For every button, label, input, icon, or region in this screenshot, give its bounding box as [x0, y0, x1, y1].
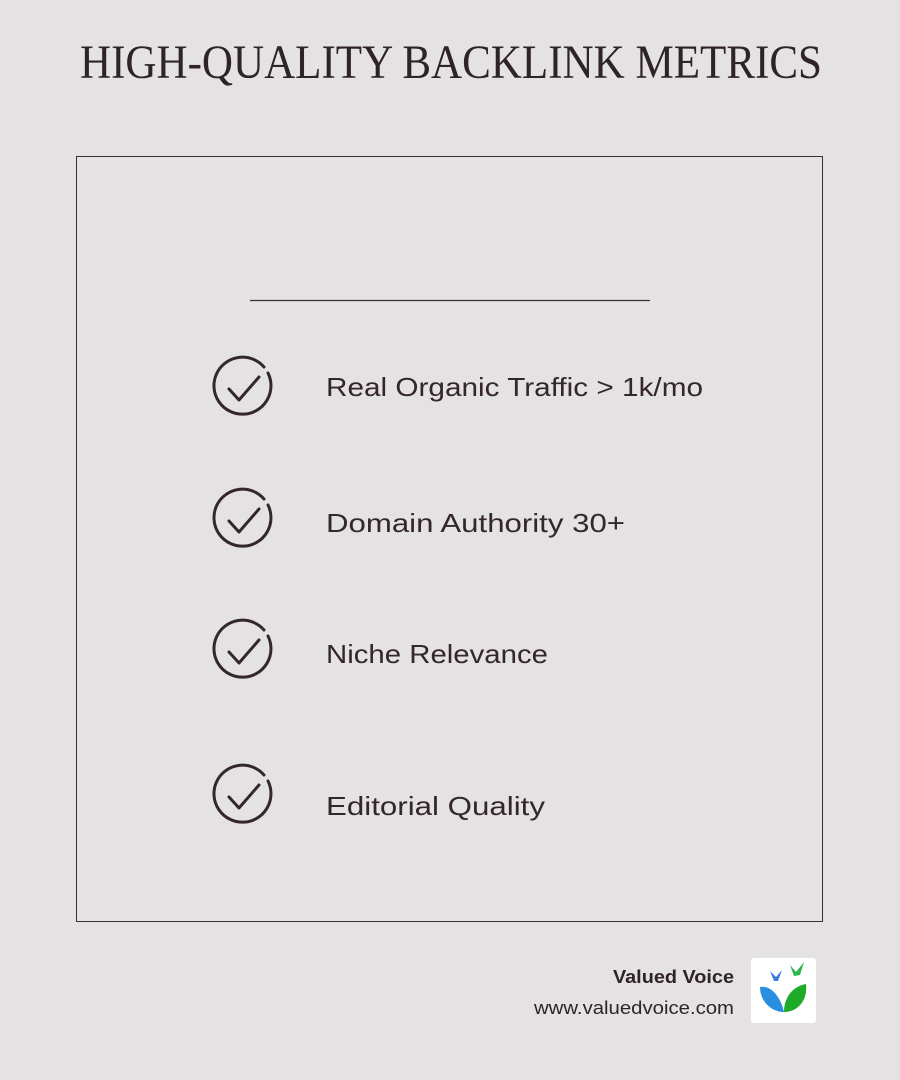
item: niche relevance [214, 620, 548, 677]
title: HIGH-QUALITY BACKLINK METRICS [80, 36, 822, 89]
icon: check circle [214, 620, 271, 677]
icon: check circle [214, 765, 271, 822]
item: organic traffic: Real Organic Traffic > 1k/mo [326, 372, 703, 402]
item: domain authority: Domain Authority 30+ [326, 508, 625, 538]
icon: check circle [214, 357, 271, 414]
item: domain authority [214, 489, 625, 546]
footer brand: www.valuedvoice.com [533, 998, 734, 1018]
item: editorial quality: Editorial Quality [326, 791, 545, 821]
item: organic traffic [214, 357, 703, 414]
icon: logo [751, 958, 816, 1023]
item: niche relevance: Niche Relevance [326, 639, 548, 669]
panel: metrics [76, 156, 822, 922]
icon: check circle [214, 489, 271, 546]
footer brand [533, 958, 816, 1023]
item: editorial quality [214, 765, 545, 822]
footer brand: Valued Voice [613, 967, 734, 987]
